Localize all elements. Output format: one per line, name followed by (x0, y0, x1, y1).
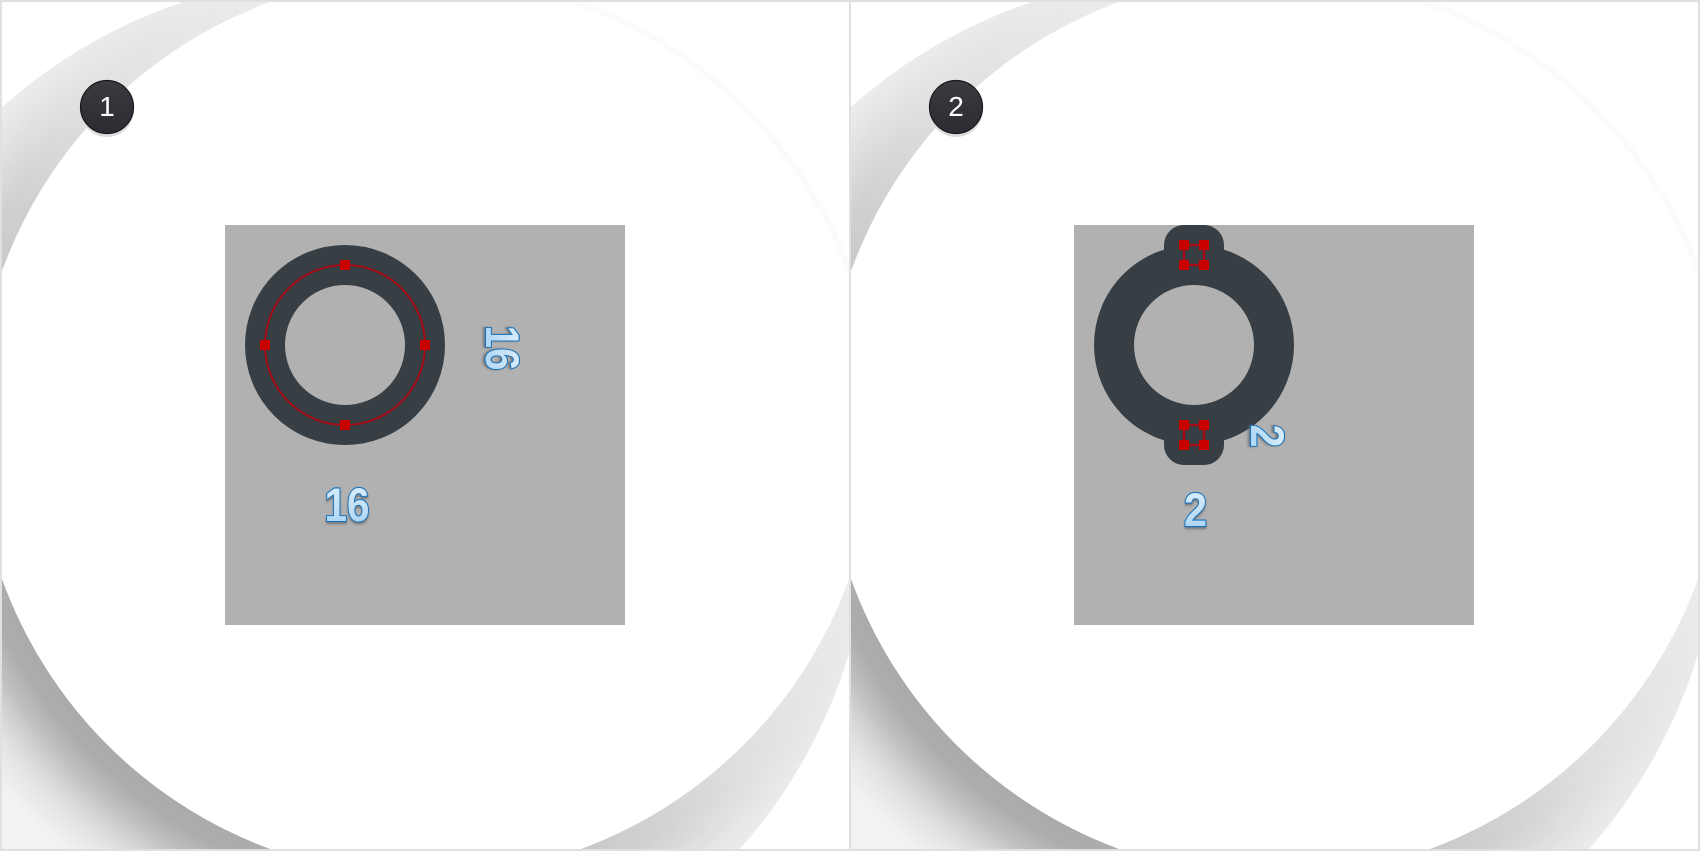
panel: step 1 (2, 2, 849, 849)
step badge 1: 1 (99, 91, 115, 122)
grey canvas (225, 225, 625, 625)
curled page shadow (2, 2, 849, 849)
panel: step 2 (851, 2, 1698, 849)
curled page shadow (851, 2, 1698, 849)
step badge 2 (929, 80, 983, 137)
step badge 1 (80, 80, 134, 137)
step badge 2: 2 (948, 91, 964, 122)
bottom square guide with anchors (1179, 420, 1209, 450)
top square guide with anchors (1179, 240, 1209, 270)
dimension label: height 16: 16 (476, 326, 529, 370)
dimension label: height 2: 2 (1241, 424, 1294, 448)
grey canvas (1074, 225, 1474, 625)
ring shape with circular guide path (260, 260, 430, 430)
ring shape with top and bottom tabs (1114, 225, 1274, 465)
dimension label: width 2: 2 (1184, 483, 1207, 536)
dimension label: width 16: 16 (324, 478, 370, 531)
